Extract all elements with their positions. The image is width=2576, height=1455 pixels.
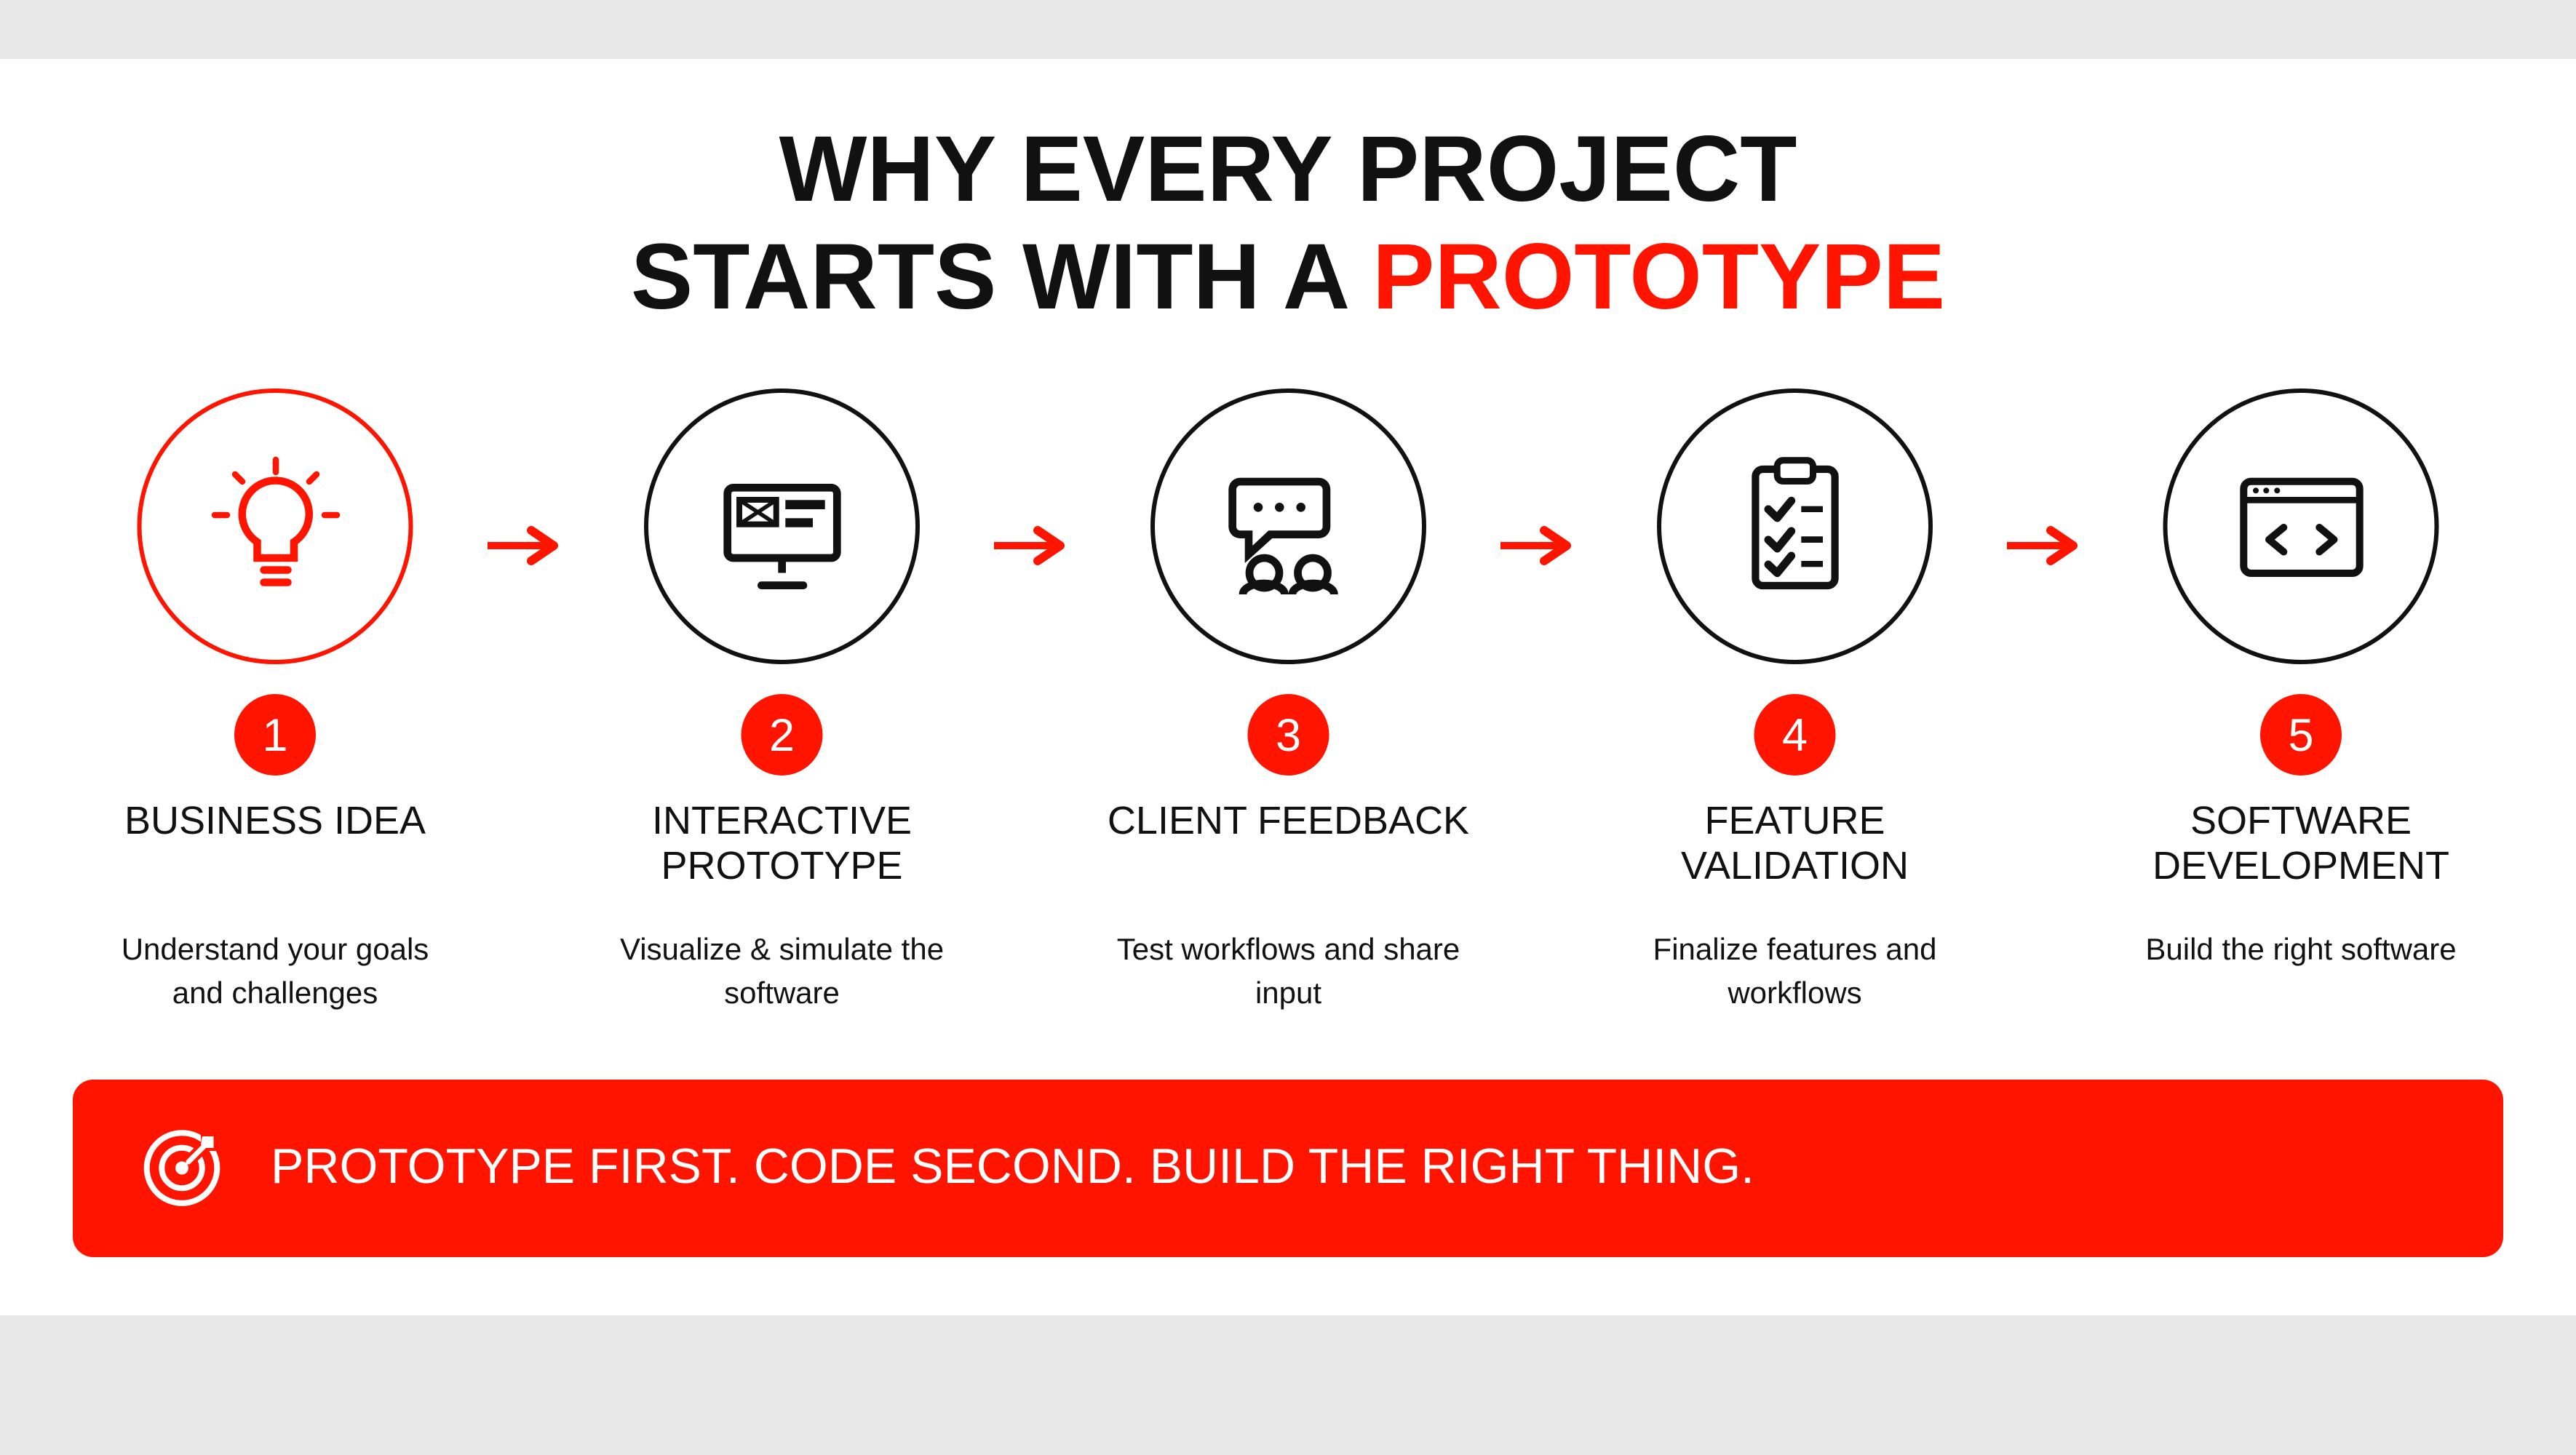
step 5 heading: SOFTWARE [2190, 799, 2412, 842]
arrow 1 to 2 [488, 530, 554, 561]
step 3: client feedback [1108, 391, 1469, 1010]
icon: code window [2243, 482, 2360, 573]
step 1 heading: BUSINESS IDEA [124, 799, 426, 842]
step 2 description: Visualize & simulate the [620, 932, 944, 966]
step 2 description: software [724, 976, 840, 1010]
step 3 description: Test workflows and share [1117, 932, 1460, 966]
icon circle 5 [2166, 391, 2436, 662]
title: STARTS WITH A PROTOTYPE [631, 225, 1945, 329]
step 4: feature validation [1653, 391, 1936, 1010]
title: WHY EVERY PROJECT [779, 117, 1797, 221]
step 2: interactive prototype [620, 391, 944, 1010]
icon circle 4 [1659, 391, 1931, 662]
badge 1 [234, 694, 316, 776]
icon: clipboard checklist [1755, 461, 1835, 586]
banner background [73, 1080, 2503, 1257]
badge 3 [1247, 694, 1329, 776]
icon: monitor with wireframe [728, 487, 837, 589]
arrow 2 to 3 [994, 530, 1060, 561]
icon: target with arrow [147, 1133, 217, 1203]
step 1 description: and challenges [172, 976, 378, 1010]
icon: light bulb [215, 460, 337, 582]
step 5 heading: DEVELOPMENT [2152, 844, 2449, 888]
step 3 description: input [1255, 976, 1321, 1010]
badge 1: 1 [262, 710, 288, 761]
step 4 description: Finalize features and [1653, 932, 1936, 966]
step 2 heading: INTERACTIVE [652, 799, 912, 842]
step 1: business idea [122, 391, 429, 1010]
banner message: PROTOTYPE FIRST. CODE SECOND. BUILD THE RIGHT THING. [271, 1139, 1754, 1194]
step 3 heading: CLIENT FEEDBACK [1108, 799, 1469, 842]
badge 5: 5 [2288, 710, 2314, 761]
step 4 heading: VALIDATION [1681, 844, 1909, 888]
arrow 4 to 5 [2007, 530, 2073, 561]
badge 5 [2260, 694, 2342, 776]
step 5: software development [2145, 391, 2457, 966]
icon circle 1 [140, 391, 410, 662]
icon circle 2 [646, 391, 918, 662]
step 2 heading: PROTOTYPE [661, 844, 903, 888]
badge 2 [741, 694, 822, 776]
icon: speech bubble and people [1228, 478, 1334, 594]
badge 4: 4 [1782, 710, 1808, 761]
badge 2: 2 [769, 710, 795, 761]
step 4 heading: FEATURE [1704, 799, 1885, 842]
banner [73, 1080, 2503, 1257]
step 4 description: workflows [1727, 976, 1862, 1010]
icon circle 3 [1153, 391, 1424, 662]
badge 3: 3 [1276, 710, 1301, 761]
arrow 3 to 4 [1500, 530, 1567, 561]
step 1 description: Understand your goals [122, 932, 429, 966]
step 5 description: Build the right software [2145, 932, 2457, 966]
badge 4 [1754, 694, 1835, 776]
